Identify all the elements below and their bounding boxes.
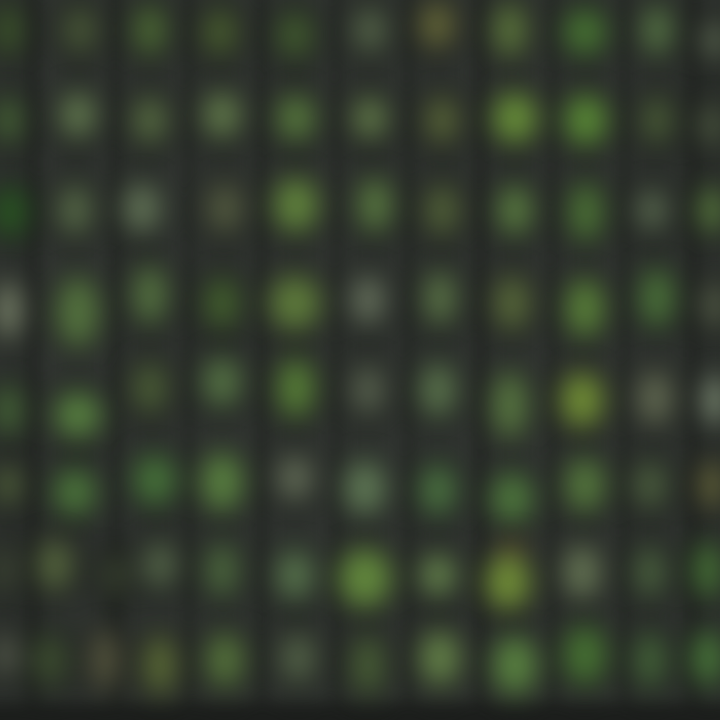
plants: row 2 (0, 91, 720, 147)
plants: row 1 (0, 1, 720, 60)
plants: row 4 (0, 265, 720, 348)
plants: row 3 (0, 177, 720, 242)
plants: row 7 (0, 539, 720, 610)
plants: row 8 (0, 625, 720, 695)
plants: row 6 (0, 452, 720, 524)
plants: row 5 (0, 356, 720, 439)
